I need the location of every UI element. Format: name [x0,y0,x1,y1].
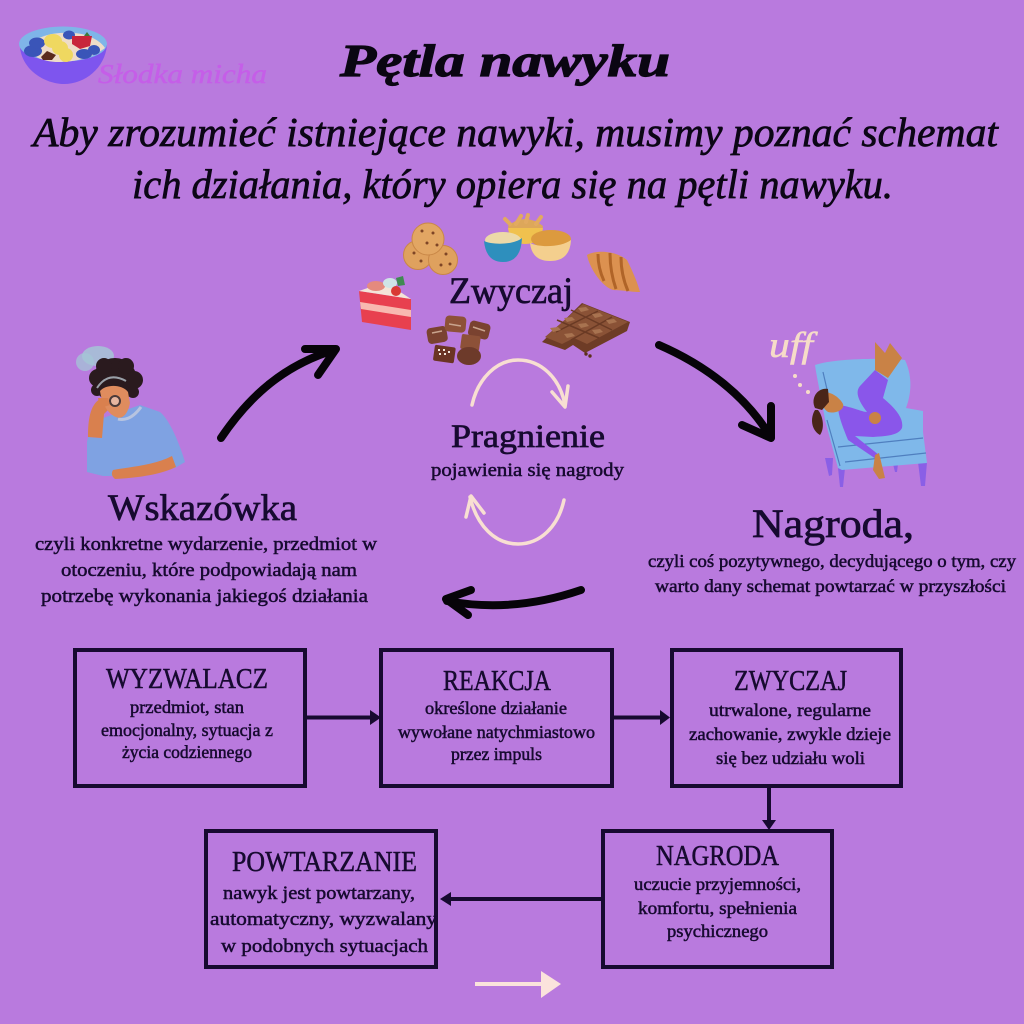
box: habit: ZWYCZAJ [734,665,847,697]
box: reaction: określone działanie [425,698,567,718]
box: trigger [75,650,305,786]
subtitle: ich działania, który opiera się na pętli nawyku. [132,161,893,207]
box: trigger: emocjonalny, sytuacja z [101,720,273,740]
title: Pętla nawyku [339,35,670,86]
icon: chocolate bar [542,303,630,358]
box: repetition: nawyk jest powtarzany, [223,883,415,904]
block: cue [35,488,377,607]
logo text: Słodka micha [98,59,267,89]
block: craving [431,419,625,481]
box: repetition: POWTARZANIE [232,846,417,878]
uff note: uff [769,325,819,365]
box: reaction: REAKCJA [443,665,551,697]
box: habit [672,650,901,786]
box: repetition [206,831,438,967]
box: repetition: w podobnych sytuacjach [221,936,429,957]
box: trigger: życia codziennego [122,742,252,762]
arrow: routine to reward [659,345,771,438]
logo: bowl [19,26,107,84]
block: craving: Pragnienie [451,419,605,455]
block: cue: potrzebę wykonania jakiegoś działania [41,586,369,607]
box: reward [603,831,832,967]
block: reward: czyli coś pozytywnego, decydującego o tym, czy [648,551,1016,571]
arrow: reaction to habit [612,710,670,725]
box: reaction [381,650,612,786]
icon: chocolates [426,315,491,365]
box: reward: psychicznego [667,921,768,941]
arrow: pink upper loop [472,360,568,407]
icon: cake slice [359,276,411,330]
arrow: trigger to reaction [305,710,381,725]
box: reward: uczucie przyjemności, [634,874,801,894]
block: cue: Wskazówka [108,488,297,529]
block: cue: otoczeniu, które podpowiadają nam [61,560,357,581]
icon: woman in armchair [769,325,927,487]
box: trigger: przedmiot, stan [130,697,244,717]
box: habit: się bez udziału woli [716,748,865,768]
icon: cookies [404,223,458,274]
arrow: pink decorative [475,971,561,998]
box: repetition: automatyczny, wyzwalany [210,909,438,930]
block: craving: pojawienia się nagrody [431,460,625,481]
arrow: pink lower loop [466,496,564,544]
icon: croissant [587,252,640,292]
icon: stressed woman [76,346,185,479]
subtitle: Aby zrozumieć istniejące nawyki, musimy poznać schemat [30,109,1000,155]
arrow: reward to cue [446,590,581,615]
arrow: reward to repetition [440,892,603,906]
block: cue: czyli konkretne wydarzenie, przedmiot w [35,534,377,555]
subtitle [30,109,1000,207]
block: reward: warto dany schemat powtarzać w przyszłości [655,576,1006,596]
box: habit: zachowanie, zwykle dzieje [689,724,891,744]
box: reaction: wywołane natychmiastowo [398,722,595,742]
arrow: habit to reward [762,787,776,830]
box: reward: NAGRODA [656,840,779,872]
box: reward: komfortu, spełnienia [638,898,797,918]
box: habit: utrwalone, regularne [709,700,871,720]
arrow: cue to routine [221,349,336,438]
block: reward: Nagroda, [752,501,914,546]
heading: Zwyczaj: Zwyczaj [449,271,573,312]
box: reaction: przez impuls [451,744,542,764]
box: trigger: WYZWALACZ [106,663,268,695]
icon: snack bowls [484,215,571,262]
block: reward [648,501,1016,596]
